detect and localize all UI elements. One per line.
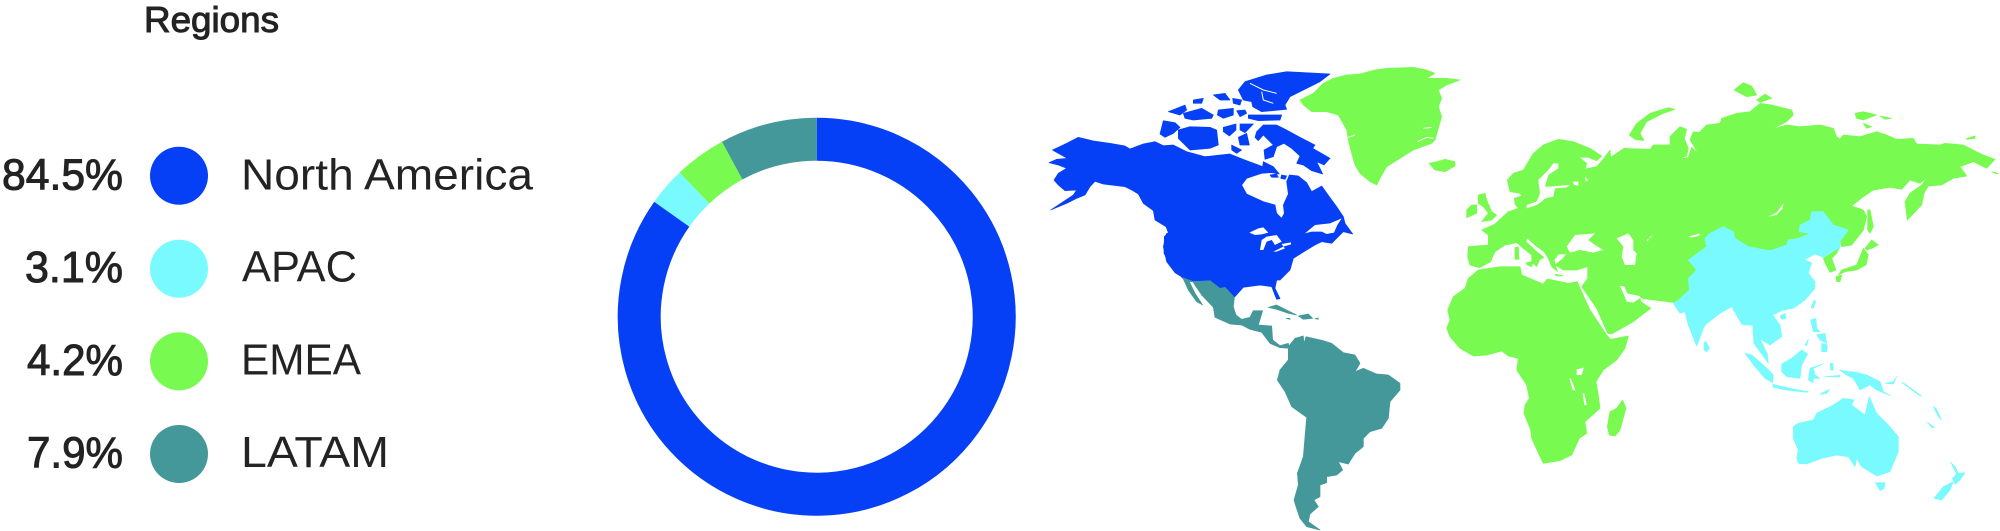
legend row: EMEA [27, 332, 362, 390]
donut chart [639, 139, 994, 494]
legend row: North America: North America [241, 150, 534, 199]
legend row: North America [2, 147, 534, 205]
world map [1049, 67, 1998, 530]
map region: EMEA [1300, 67, 1998, 463]
legend row: LATAM [27, 425, 389, 483]
legend [2, 147, 534, 483]
legend row: LATAM: 7.9% [27, 428, 123, 478]
legend row: LATAM: LATAM [241, 428, 389, 477]
legend row: EMEA: EMEA [241, 335, 362, 384]
heading: Regions: Regions [144, 0, 279, 40]
legend row: APAC [25, 240, 357, 298]
legend row: APAC: 3.1% [25, 243, 123, 292]
legend row: North America: 84.5% [2, 150, 123, 200]
legend row: APAC: APAC [242, 243, 357, 292]
legend row: EMEA: 4.2% [27, 336, 123, 385]
map region: LATAM [1183, 278, 1400, 530]
map region: North America [1049, 72, 1353, 299]
map region: APAC [1673, 212, 1965, 500]
